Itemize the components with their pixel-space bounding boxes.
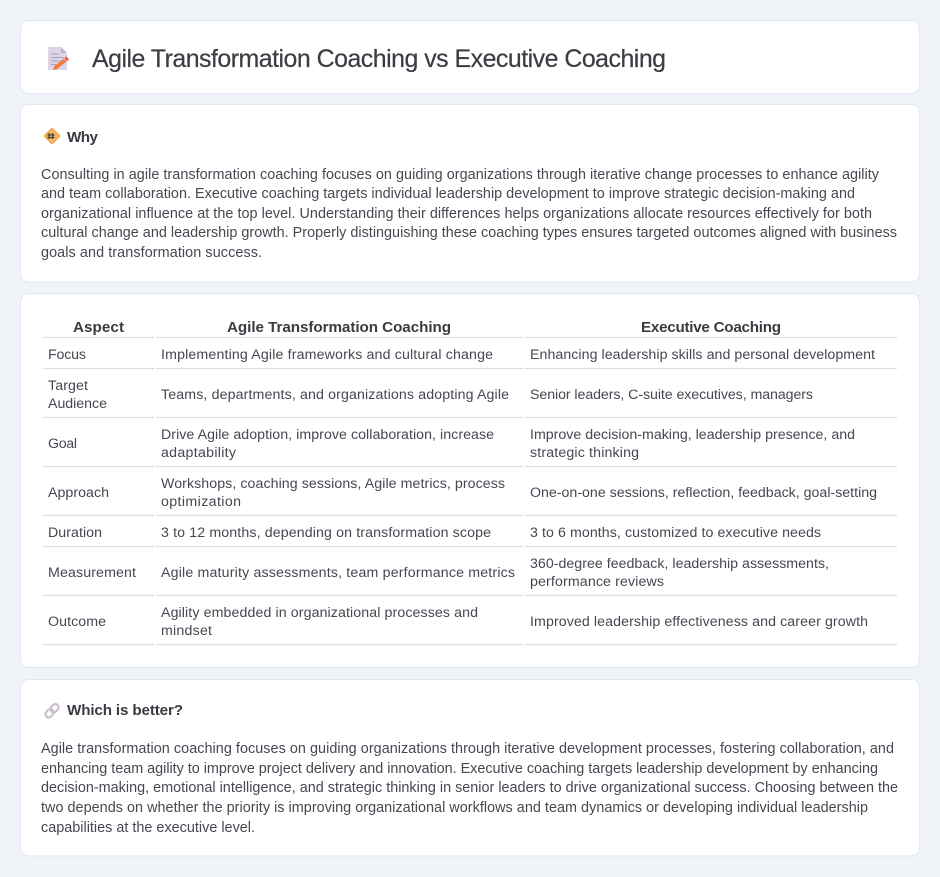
table header row: Agile Transformation Coaching xyxy=(227,319,451,336)
table row: outcome: Agility embedded in organizational processes and xyxy=(161,605,478,621)
table row: outcome: mindset xyxy=(161,623,212,639)
panel: why xyxy=(20,104,920,282)
text block: why paragraph: and team collaboration. Executive coaching targets individual leadership development to improve strategic decision-making and xyxy=(41,186,855,202)
table row: measurement: 360-degree feedback, leadership assessments, xyxy=(530,556,829,572)
heading: which is better: Which is better? xyxy=(67,702,183,719)
table row: duration: 3 to 6 months, customized to executive needs xyxy=(530,525,821,541)
panel: page header xyxy=(20,20,920,94)
table row: focus xyxy=(48,347,875,363)
table row: goal: Improve decision-making, leadership presence, and xyxy=(530,427,855,443)
table row: goal xyxy=(48,427,855,461)
text block: which is better paragraph: enhancing team agility to improve project delivery and innovation. Executive coaching targets leadership development by enhancing xyxy=(41,761,878,777)
table header row: Executive Coaching xyxy=(641,319,781,336)
text block: which is better paragraph: capabilities at the executive level. xyxy=(41,820,255,836)
table row: target audience: Target xyxy=(48,378,88,394)
panel: comparison table xyxy=(20,294,920,668)
text block: why paragraph: cultural change and leadership growth. Properly distinguishing these coaching types ensures targeted outcomes aligned with business xyxy=(41,225,897,241)
table row: goal: Goal xyxy=(48,436,77,452)
table row: duration: 3 to 12 months, depending on transformation scope xyxy=(161,525,491,541)
heading: why: Why xyxy=(67,129,99,146)
icon: memo with pencil xyxy=(48,47,69,70)
table row: measurement xyxy=(48,556,829,590)
table row: measurement: performance reviews xyxy=(530,574,664,590)
table row: goal: adaptability xyxy=(161,445,237,461)
icon: chain link xyxy=(44,703,60,719)
table row: outcome xyxy=(48,605,868,639)
text block: why paragraph xyxy=(41,167,897,261)
panel: which is better xyxy=(20,680,920,856)
table row: approach: optimization xyxy=(161,494,241,510)
table row: duration xyxy=(48,525,821,541)
text block: which is better paragraph: Agile transformation coaching focuses on guiding organizations through iterative development processes, fostering collaboration, and xyxy=(41,741,894,757)
text block: why paragraph: Consulting in agile transformation coaching focuses on guiding organizations through iterative change processes to enhance agility xyxy=(41,167,880,183)
table row: focus: Implementing Agile frameworks and cultural change xyxy=(161,347,493,363)
table row: target audience: Audience xyxy=(48,396,107,412)
table row: goal: Drive Agile adoption, improve collaboration, increase xyxy=(161,427,494,443)
table row: measurement: Agile maturity assessments, team performance metrics xyxy=(161,565,515,581)
table row: approach: Workshops, coaching sessions, Agile metrics, process xyxy=(161,476,505,492)
table row: approach xyxy=(48,476,877,510)
text block: which is better paragraph: decision-making, emotional intelligence, and strategic thinking in senior leaders to drive organizational success. Choosing between the xyxy=(41,780,898,796)
table row: approach: Approach xyxy=(48,485,109,501)
table header row xyxy=(73,319,781,336)
title: Agile Transformation Coaching vs Executive Coaching xyxy=(92,45,666,73)
table row: approach: One-on-one sessions, reflection, feedback, goal-setting xyxy=(530,485,877,501)
table row: target audience xyxy=(48,378,813,412)
text block: why paragraph: goals and transformation success. xyxy=(41,245,262,261)
table header row: Aspect xyxy=(73,319,124,336)
text block: which is better paragraph: two depends on whether the priority is improving organizational workflows and team dynamics or developing individual leadership xyxy=(41,800,868,816)
icon: orange diamond sign xyxy=(44,128,60,144)
text block: which is better paragraph xyxy=(41,741,898,836)
text block: why paragraph: organizational influence at the top level. Understanding their differences helps organizations allocate resources effectively for both xyxy=(41,206,872,222)
table row: duration: Duration xyxy=(48,525,102,541)
table row: outcome: Improved leadership effectiveness and career growth xyxy=(530,614,868,630)
table row: goal: strategic thinking xyxy=(530,445,639,461)
table row: focus: Focus xyxy=(48,347,86,363)
table row: target audience: Senior leaders, C-suite executives, managers xyxy=(530,387,813,403)
table row: target audience: Teams, departments, and organizations adopting Agile xyxy=(161,387,509,403)
table row: outcome: Outcome xyxy=(48,614,106,630)
table row: focus: Enhancing leadership skills and personal development xyxy=(530,347,875,363)
table row: measurement: Measurement xyxy=(48,565,136,581)
